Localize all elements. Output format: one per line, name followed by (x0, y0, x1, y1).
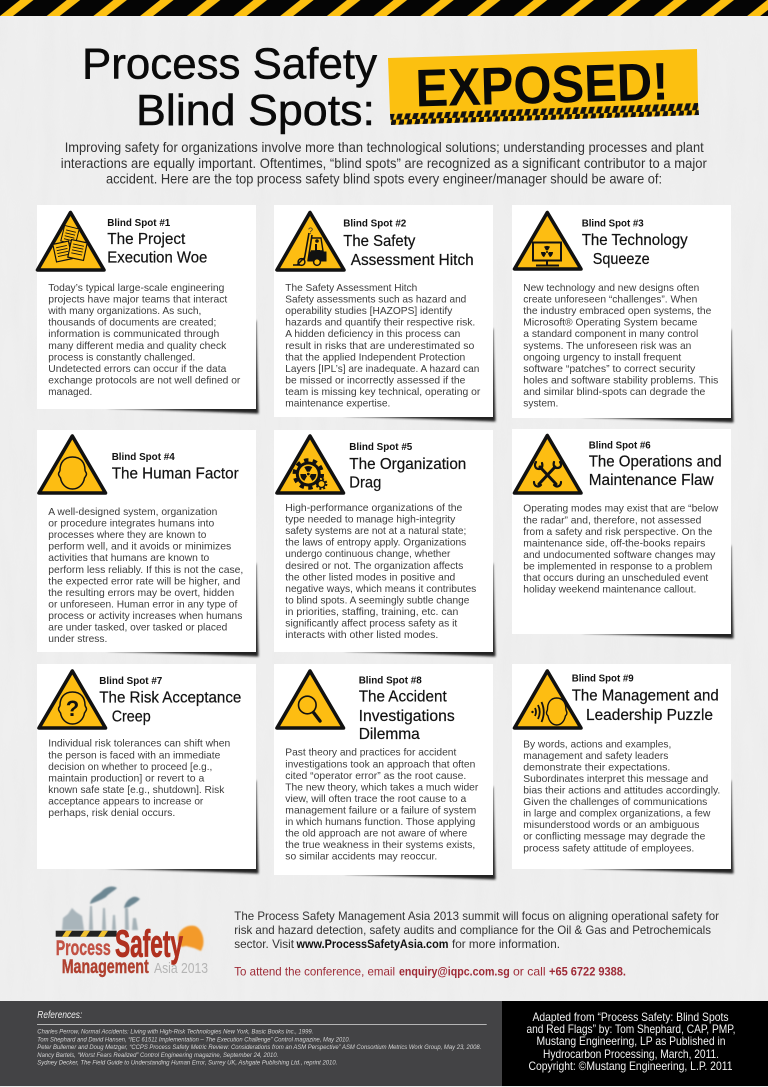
heading: Assessment Hitch (351, 252, 474, 269)
body text: the expected error rate will be higher, and (48, 576, 241, 587)
body text: and undocumented software changes may (523, 550, 716, 561)
logo: process safety management asia 2013: Process (56, 937, 111, 960)
body text: Layers [IPL’s] are inadequate. A hazard can (285, 364, 480, 375)
body text: or unforeseen. Human error in any type of (48, 599, 237, 610)
references panel: Sydney Decker, The Field Guide to Understanding Human Error, Surrey UK, Ashgate Publishing Ltd., reprint 2010. (37, 1060, 337, 1067)
body text: thousands of documents are created; (48, 318, 216, 329)
heading: Blind Spot #2 (343, 219, 407, 230)
panel: blind spot 2 (274, 205, 496, 422)
body text: projects have major teams that interact (48, 295, 227, 306)
body text: acceptance appears to increase or (48, 796, 204, 808)
heading: The Safety (343, 233, 415, 250)
body text: the old approach are not aware of where (285, 829, 468, 840)
body text: software “patches” to correct security (523, 364, 696, 375)
heading: Blind Spot #1 (107, 218, 171, 229)
attribution panel: Adapted from “Process Safety: Blind Spots (532, 1010, 728, 1024)
body text: known safe state [e.g., shutdown]. Risk (48, 785, 225, 796)
icon: documents warning (38, 212, 104, 270)
body text: demonstrate their expectations. (523, 762, 670, 773)
body text: that the applied Independent Protection (285, 352, 466, 363)
body text: are under tasked, over tasked or placed (48, 622, 228, 634)
body text: safety systems are not at a natural state; (285, 526, 466, 537)
body text (523, 739, 720, 854)
body text: view, will often trace the root cause to a (285, 794, 467, 805)
body text: undergo continuous change, whether (285, 549, 451, 560)
heading (572, 674, 719, 724)
body text: Today’s typical large-scale engineering (48, 283, 225, 294)
attribution panel: Hydrocarbon Processing, March, 2011. (543, 1047, 719, 1061)
icon: human head warning (39, 436, 106, 493)
body text (48, 507, 243, 645)
body text: create unforeseen “challenges”. When (523, 295, 698, 306)
body text: the other listed modes in positive and (285, 572, 456, 583)
intro text (61, 139, 707, 186)
body text: ongoing urgency to install frequent (523, 352, 681, 363)
attribution panel: and Red Flags” by: Tom Shephard, CAP, PMP, (526, 1022, 736, 1036)
panel: blind spot 3 (512, 205, 734, 422)
body text: that occurs during an unscheduled event (523, 573, 708, 584)
icon: monitor radiation warning (514, 212, 581, 269)
heading: Leadership Puzzle (586, 707, 713, 724)
heading: Blind Spot #4 (112, 452, 175, 463)
heading (343, 219, 474, 269)
heading (582, 218, 688, 268)
body text: or conflicting message may degrade the (523, 832, 706, 843)
hazard stripe top border (0, 0, 768, 16)
heading: The Technology (582, 232, 688, 249)
panel: blind spot 7 (37, 664, 258, 874)
body text: bias their actions and attitudes accordingly. (523, 786, 720, 796)
body text: system. (523, 398, 558, 410)
body text: New technology and new designs often (523, 283, 700, 294)
body text: holiday weekend maintenance callout. (523, 585, 696, 596)
summit promo text (234, 909, 719, 951)
body text (285, 748, 479, 863)
heading: Squeeze (593, 251, 650, 268)
title: Blind Spots: (136, 86, 375, 135)
body text: systems. The unforeseen risk was an (523, 341, 692, 352)
summit promo text: The Process Safety Management Asia 2013 summit will focus on aligning operational safety for (234, 909, 719, 923)
icon: magnifier warning (277, 671, 344, 728)
body text: Past theory and practices for accident (285, 748, 456, 759)
heading: The Organization (349, 456, 466, 473)
body text: decision on whether to proceed [e.g., (48, 762, 212, 773)
conference contact line (234, 965, 626, 979)
body text: Given the challenges of communications (523, 797, 707, 808)
body text: cited “operator error” as the root cause. (285, 771, 466, 782)
heading: Creep (112, 709, 151, 726)
exposed banner: EXPOSED! (415, 52, 669, 118)
body text: misunderstood words or an ambiguous (523, 820, 699, 831)
body text: Microsoft® Operating System became (523, 318, 698, 329)
icon: speaking head warning (514, 671, 581, 728)
body text: be missed or incorrectly assessed if the (285, 375, 466, 386)
body text: management failure or a failure of system (285, 806, 476, 816)
body text: significantly affect process safety as it (285, 618, 457, 630)
summit promo text: risk and hazard detection, safety audits and compliance for the Oil & Gas and Petrochemicals (234, 923, 711, 937)
panel: blind spot 4 (37, 430, 258, 656)
body text: in priorities, staffing, training, etc. can (285, 607, 459, 618)
body text: result in risks that are underestimated so (285, 341, 475, 352)
body text: investigations took an approach that often (285, 759, 476, 770)
body text: process safety attitude of employees. (523, 843, 694, 854)
body text (48, 739, 231, 819)
conference contact line: or call (513, 965, 546, 979)
body text: Undetected errors can occur if the data (48, 364, 227, 375)
body text: the radar” and, therefore, not assessed (523, 515, 702, 526)
body text: team is missing key technical, operating or (285, 387, 481, 398)
conference contact line: enquiry@iqpc.com.sg (399, 965, 510, 979)
heading: The Project (107, 231, 186, 248)
icon: head question warning: ? (66, 696, 79, 721)
body text: Individual risk tolerances can shift when (48, 739, 231, 750)
heading: Blind Spot #9 (572, 674, 634, 685)
references panel (0, 1001, 502, 1086)
references panel: Charles Perrow, Normal Accidents: Living with High-Risk Technologies New York, Basic Books Inc., 1999. (37, 1028, 313, 1036)
body text: so similar accidents may reoccur. (285, 852, 437, 863)
icon: forklift warning (277, 212, 344, 270)
body text: managed. (48, 387, 92, 398)
heading: Blind Spot #8 (359, 675, 422, 686)
references panel: Nancy Bartels, “Worst Fears Realized” Control Engineering magazine, September 24, 2010. (37, 1052, 278, 1059)
body text: the laws of entropy apply. Organizations (285, 538, 466, 549)
panel: blind spot 9 (512, 664, 734, 874)
heading: Blind Spot #7 (99, 676, 163, 687)
body text: negative ways, which means it contributes (285, 584, 476, 595)
body text: information is communicated through (48, 329, 220, 340)
body text: perform less reliably. If this is not the case, (48, 565, 243, 576)
body text: exchange protocols are not well defined or (48, 375, 241, 386)
body text: with many organizations. As such, (47, 306, 201, 317)
conference contact line: To attend the conference, email (234, 965, 395, 979)
references panel: Tom Shephard and David Hansen, “IEC 61511 Implementation – The Execution Challenge” Control magazine, May 2010. (37, 1036, 350, 1043)
body text: perform well, and it avoids or minimizes (48, 542, 231, 553)
heading: Blind Spot #6 (589, 440, 651, 451)
body text: perhaps, risk denial occurs. (48, 808, 175, 819)
body text: Operating modes may exist that are “below (523, 504, 719, 515)
icon: forklift warning: ? (308, 226, 313, 236)
body text: type needed to manage high-integrity (285, 515, 456, 526)
body text: the industry embraced open systems, the (523, 306, 712, 317)
body text: or procedure integrates humans into (48, 519, 215, 530)
heading: Blind Spot #3 (582, 218, 644, 230)
conference contact line: +65 6722 9388. (549, 965, 626, 979)
body text: the resulting errors may be overt, hidden (48, 588, 235, 599)
references panel: Peter Bullemer and Doug Metzger, “CCPS Process Safety Metric Review: Considerations from an ASM Perspective” ASM Consortium Metrics Work Group, May 23, 2008. (37, 1044, 481, 1051)
body text (285, 503, 476, 641)
body text: management and safety leaders (523, 751, 668, 762)
heading: The Accident (359, 689, 447, 706)
heading: Maintenance Flaw (589, 472, 714, 489)
body text: operability studies [HAZOPS] identify (285, 306, 453, 317)
heading: The Risk Acceptance (99, 690, 241, 707)
heading (349, 442, 466, 491)
heading: The Human Factor (112, 465, 239, 482)
heading (589, 440, 722, 489)
body text: many different media and quality check (48, 341, 227, 352)
body text: A hidden deficiency in this process can (285, 329, 461, 340)
panel: blind spot 6 (512, 429, 734, 638)
body text: A well-designed system, organization (48, 507, 218, 518)
body text: The new theory, which takes a much wider (285, 782, 479, 793)
body text: hazards and quantify their respective risk. (285, 318, 475, 329)
body text: High-performance organizations of the (285, 503, 463, 514)
attribution panel: Copyright: ©Mustang Engineering, L.P. 2011 (528, 1059, 733, 1073)
heading: Blind Spot #5 (349, 442, 413, 453)
body text (523, 283, 718, 410)
logo: process safety management asia 2013: Management (62, 957, 149, 978)
body text (285, 283, 481, 410)
body text: in large and complex organizations, a few (523, 809, 711, 820)
body text: from a safety and risk perspective. On the (523, 527, 713, 538)
body text: interacts with other listed modes. (285, 630, 438, 641)
body text (47, 283, 241, 398)
body text: desired or not. The organization affects (285, 561, 463, 572)
panel: blind spot 8 (274, 664, 496, 880)
icon: crossed wrenches warning (514, 436, 581, 493)
body text: to blind spots. A seemingly subtle change (285, 595, 470, 606)
heading: The Management and (572, 688, 719, 705)
heading (107, 218, 207, 267)
references panel: References: (37, 1010, 82, 1021)
body text: be implemented in response to a problem (523, 562, 712, 572)
body text: the true weakness in their systems exists, (285, 840, 475, 851)
body text: under stress. (48, 634, 107, 645)
heading: The Operations and (589, 454, 722, 471)
body text: Subordinates interpret this message and (523, 774, 709, 785)
logo: process safety management asia 2013: Asia 2013 (154, 960, 208, 977)
heading: Dilemma (359, 726, 420, 743)
body text (523, 504, 719, 596)
body text: By words, actions and examples, (523, 739, 671, 750)
heading (112, 452, 239, 482)
heading: Investigations (359, 708, 455, 725)
intro text: accident. Here are the top process safety blind spots every engineer/manager should be aware of: (106, 170, 662, 186)
body text: The Safety Assessment Hitch (285, 283, 418, 294)
body text: maintain production] or revert to a (48, 773, 205, 784)
body text: process is constantly challenged. (48, 352, 195, 363)
summit promo text: sector. Visit (234, 937, 295, 951)
intro text: interactions are equally important. Oftentimes, “blind spots” are recognized as a significant contributor to a major (61, 155, 707, 171)
body text: maintenance side, off-the-books repairs (523, 538, 705, 549)
attribution panel (502, 1001, 768, 1086)
heading (359, 675, 455, 743)
body text: the person is faced with an immediate (48, 750, 221, 761)
body text: a standard component in many control (523, 329, 698, 340)
title (82, 40, 377, 135)
panel: blind spot 1 (37, 205, 258, 414)
logo: process safety management asia 2013: Safety (115, 924, 183, 966)
summit promo text: for more information. (452, 937, 560, 951)
panel: blind spot 5 (274, 430, 496, 656)
body text: in which humans function. Those applying (285, 817, 476, 828)
body text: process or activity increases when humans (48, 611, 242, 622)
heading: Execution Woe (107, 250, 207, 267)
summit promo text: www.ProcessSafetyAsia.com (296, 937, 448, 951)
body text: activities that humans are known to (48, 553, 210, 564)
intro text: Improving safety for organizations involve more than technological solutions; understanding processes and plant (65, 139, 704, 155)
heading: Drag (349, 474, 381, 491)
icon: head question warning (39, 671, 106, 728)
body text: holes and software stability problems. This (523, 375, 718, 386)
body text: maintenance expertise. (285, 398, 390, 410)
body text: and similar blind-spots can degrade the (523, 387, 706, 398)
attribution panel: Mustang Engineering, LP as Published in (536, 1034, 726, 1048)
body text: Safety assessments such as hazard and (285, 295, 467, 306)
heading (99, 676, 241, 726)
title: Process Safety (82, 40, 377, 88)
icon: gears radiation warning (277, 436, 344, 493)
body text: processes where they are known to (48, 530, 207, 541)
logo: process safety management asia 2013 (56, 887, 208, 978)
